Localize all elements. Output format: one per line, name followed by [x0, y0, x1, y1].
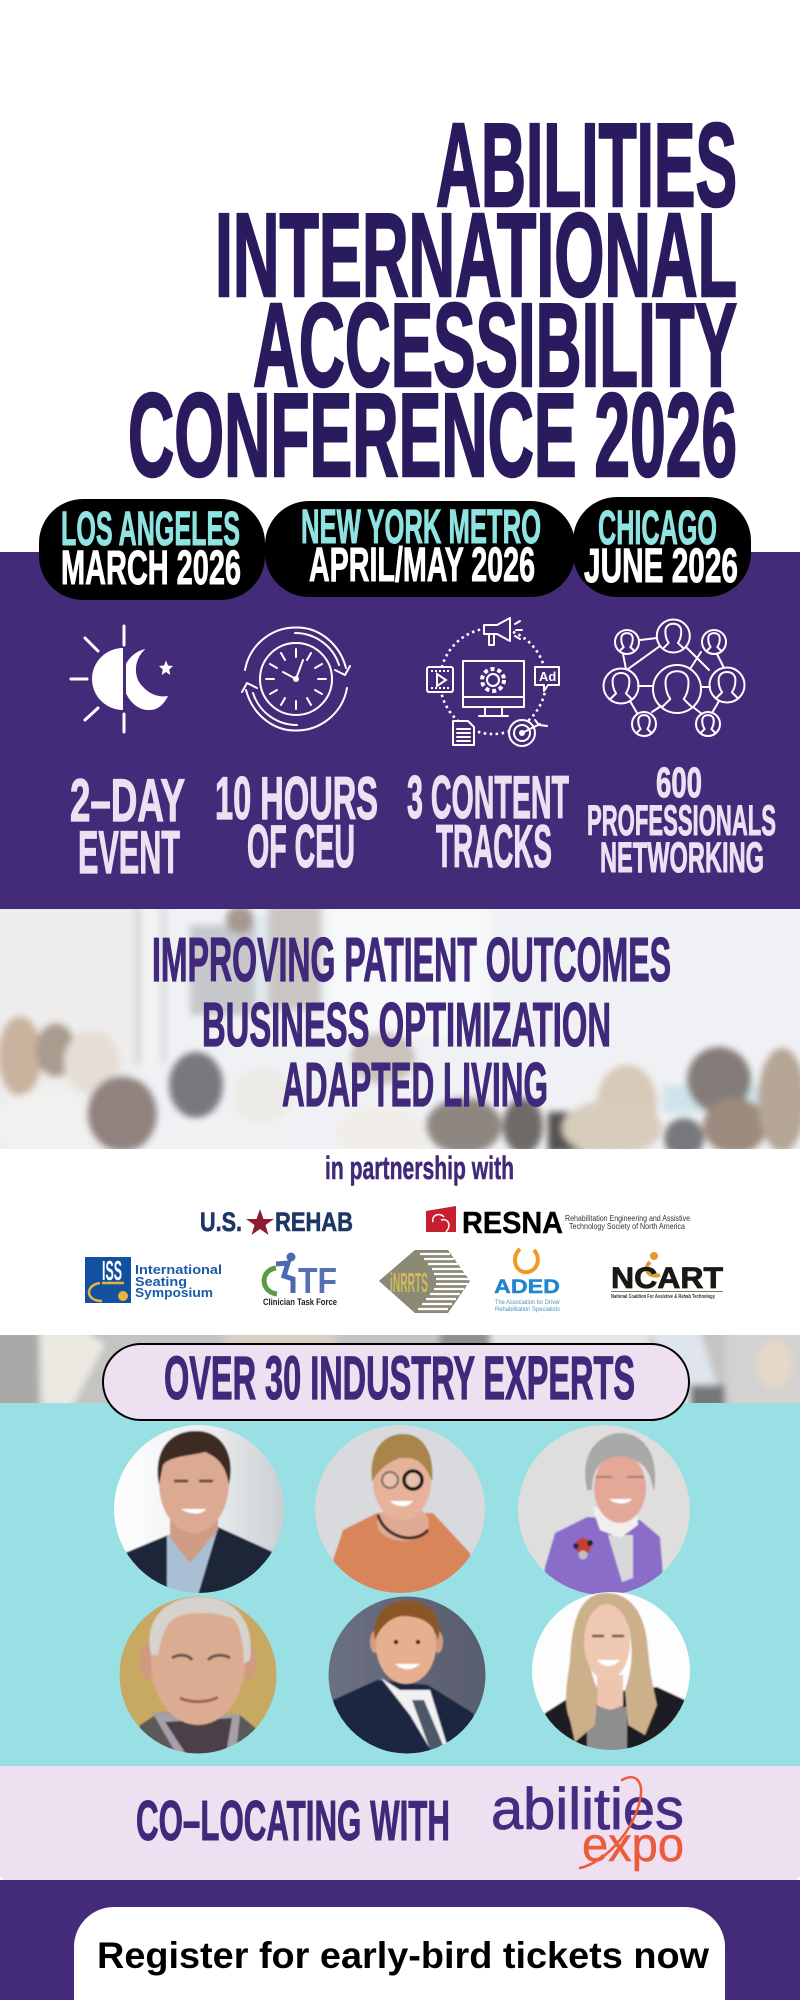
icon: clock with cycle arrows	[242, 627, 350, 731]
target	[509, 720, 547, 746]
photo: speaker 2	[315, 1425, 485, 1593]
logo: ADED: ADED	[494, 1277, 560, 1298]
panel: purple event stats band	[0, 552, 800, 909]
photo: speaker 6	[532, 1592, 690, 1750]
logo: ADED: Rehabilitation Specialists	[495, 1306, 561, 1313]
stat: 600 professionals networking	[587, 759, 776, 882]
ad bubble: Ad	[539, 669, 556, 684]
photo: speaker 1	[114, 1425, 284, 1593]
document	[453, 721, 474, 745]
logo: Clinician Task Force: Clinician Task Force	[263, 1297, 337, 1307]
logo: International Seating Symposium	[85, 1255, 222, 1303]
pill: New York Metro date: APRIL/MAY 2026	[309, 539, 535, 592]
logo: U.S. Rehab: U.S.	[200, 1207, 242, 1237]
topics text	[152, 926, 671, 1120]
logo: U.S. Rehab: REHAB	[275, 1207, 353, 1237]
stat: 10 hours of CEU: 10 HOURS	[215, 765, 378, 832]
photo band behind experts pill	[0, 1335, 800, 1403]
pill: Los Angeles date: MARCH 2026	[61, 542, 241, 595]
stat: 2-day event: 2–DAY	[70, 767, 185, 834]
photo: speaker 5	[328, 1596, 486, 1754]
logo: RESNA: RESNA	[462, 1205, 563, 1240]
logo: Clinician Task Force	[263, 1252, 337, 1307]
stat: 3 content tracks	[407, 764, 569, 880]
logo: NCART: NCART	[611, 1262, 723, 1295]
monitor	[463, 661, 524, 716]
pill: New York Metro date	[265, 501, 575, 597]
heading: in partnership with: in partnership with	[325, 1150, 514, 1186]
logo: NCART: National Coalition For Assistive & Rehab Technology	[611, 1294, 715, 1300]
co-locating text: CO–LOCATING WITH	[136, 1789, 450, 1853]
logo: abilities expo: abilities	[491, 1777, 684, 1842]
pill: Los Angeles date: LOS ANGELES	[61, 503, 240, 556]
photo: speaker 3	[518, 1425, 690, 1594]
logo: ADED: The Association for Driver	[495, 1299, 561, 1306]
logo: International Seating Symposium: ISS	[102, 1255, 122, 1286]
stat: 10 hours of CEU: OF CEU	[247, 813, 355, 880]
stat: 600 professionals networking: 600	[656, 759, 702, 807]
logo: International Seating Symposium: Symposium	[135, 1285, 213, 1300]
panel: blurred audience photo with topics	[0, 905, 800, 1162]
logo: abilities expo: expo	[582, 1819, 684, 1872]
panel: co-locating band	[0, 1766, 800, 1880]
megaphone	[484, 618, 522, 645]
logo: U.S. Rehab	[200, 1207, 353, 1237]
logo: RESNA: Rehabilitation Engineering and Assistive	[565, 1214, 690, 1223]
logo: iNRRTS: iNRRTS	[390, 1267, 428, 1298]
logo: abilities expo	[491, 1777, 684, 1872]
video	[427, 667, 453, 692]
logo: RESNA	[426, 1205, 690, 1240]
stat: 2-day event: EVENT	[78, 819, 180, 886]
logo: ADED	[494, 1249, 561, 1313]
logo: International Seating Symposium: Seating	[135, 1274, 187, 1289]
pill: New York Metro date: NEW YORK METRO	[301, 501, 541, 554]
pill: Los Angeles date	[39, 499, 265, 600]
logo: Clinician Task Force: TF	[298, 1260, 337, 1301]
icon: professional network	[604, 620, 744, 736]
logo: NCART	[611, 1252, 723, 1300]
logo: International Seating Symposium: International	[135, 1262, 222, 1277]
stat: 3 content tracks: TRACKS	[436, 813, 552, 880]
panel: teal speakers background	[0, 1403, 800, 1766]
button: register	[74, 1907, 725, 2000]
pill: Chicago date	[573, 497, 751, 597]
stat: 10 hours of CEU	[215, 765, 378, 880]
panel: purple footer	[0, 1880, 800, 2000]
text: 3 CONTENT	[407, 764, 569, 831]
button: register: Register for early-bird tickets now	[97, 1935, 709, 1976]
logo: RESNA: Technology Society of North America	[569, 1222, 685, 1231]
icon: content tracks	[427, 618, 559, 746]
title	[128, 99, 737, 502]
logo: iNRRTS	[379, 1250, 470, 1313]
pill: over 30 industry experts	[103, 1344, 689, 1420]
icon: day and night	[71, 626, 173, 732]
topics text: ADAPTED LIVING	[282, 1051, 548, 1120]
photo: speaker 4	[120, 1596, 276, 1754]
stat: 2-day event	[70, 767, 185, 886]
